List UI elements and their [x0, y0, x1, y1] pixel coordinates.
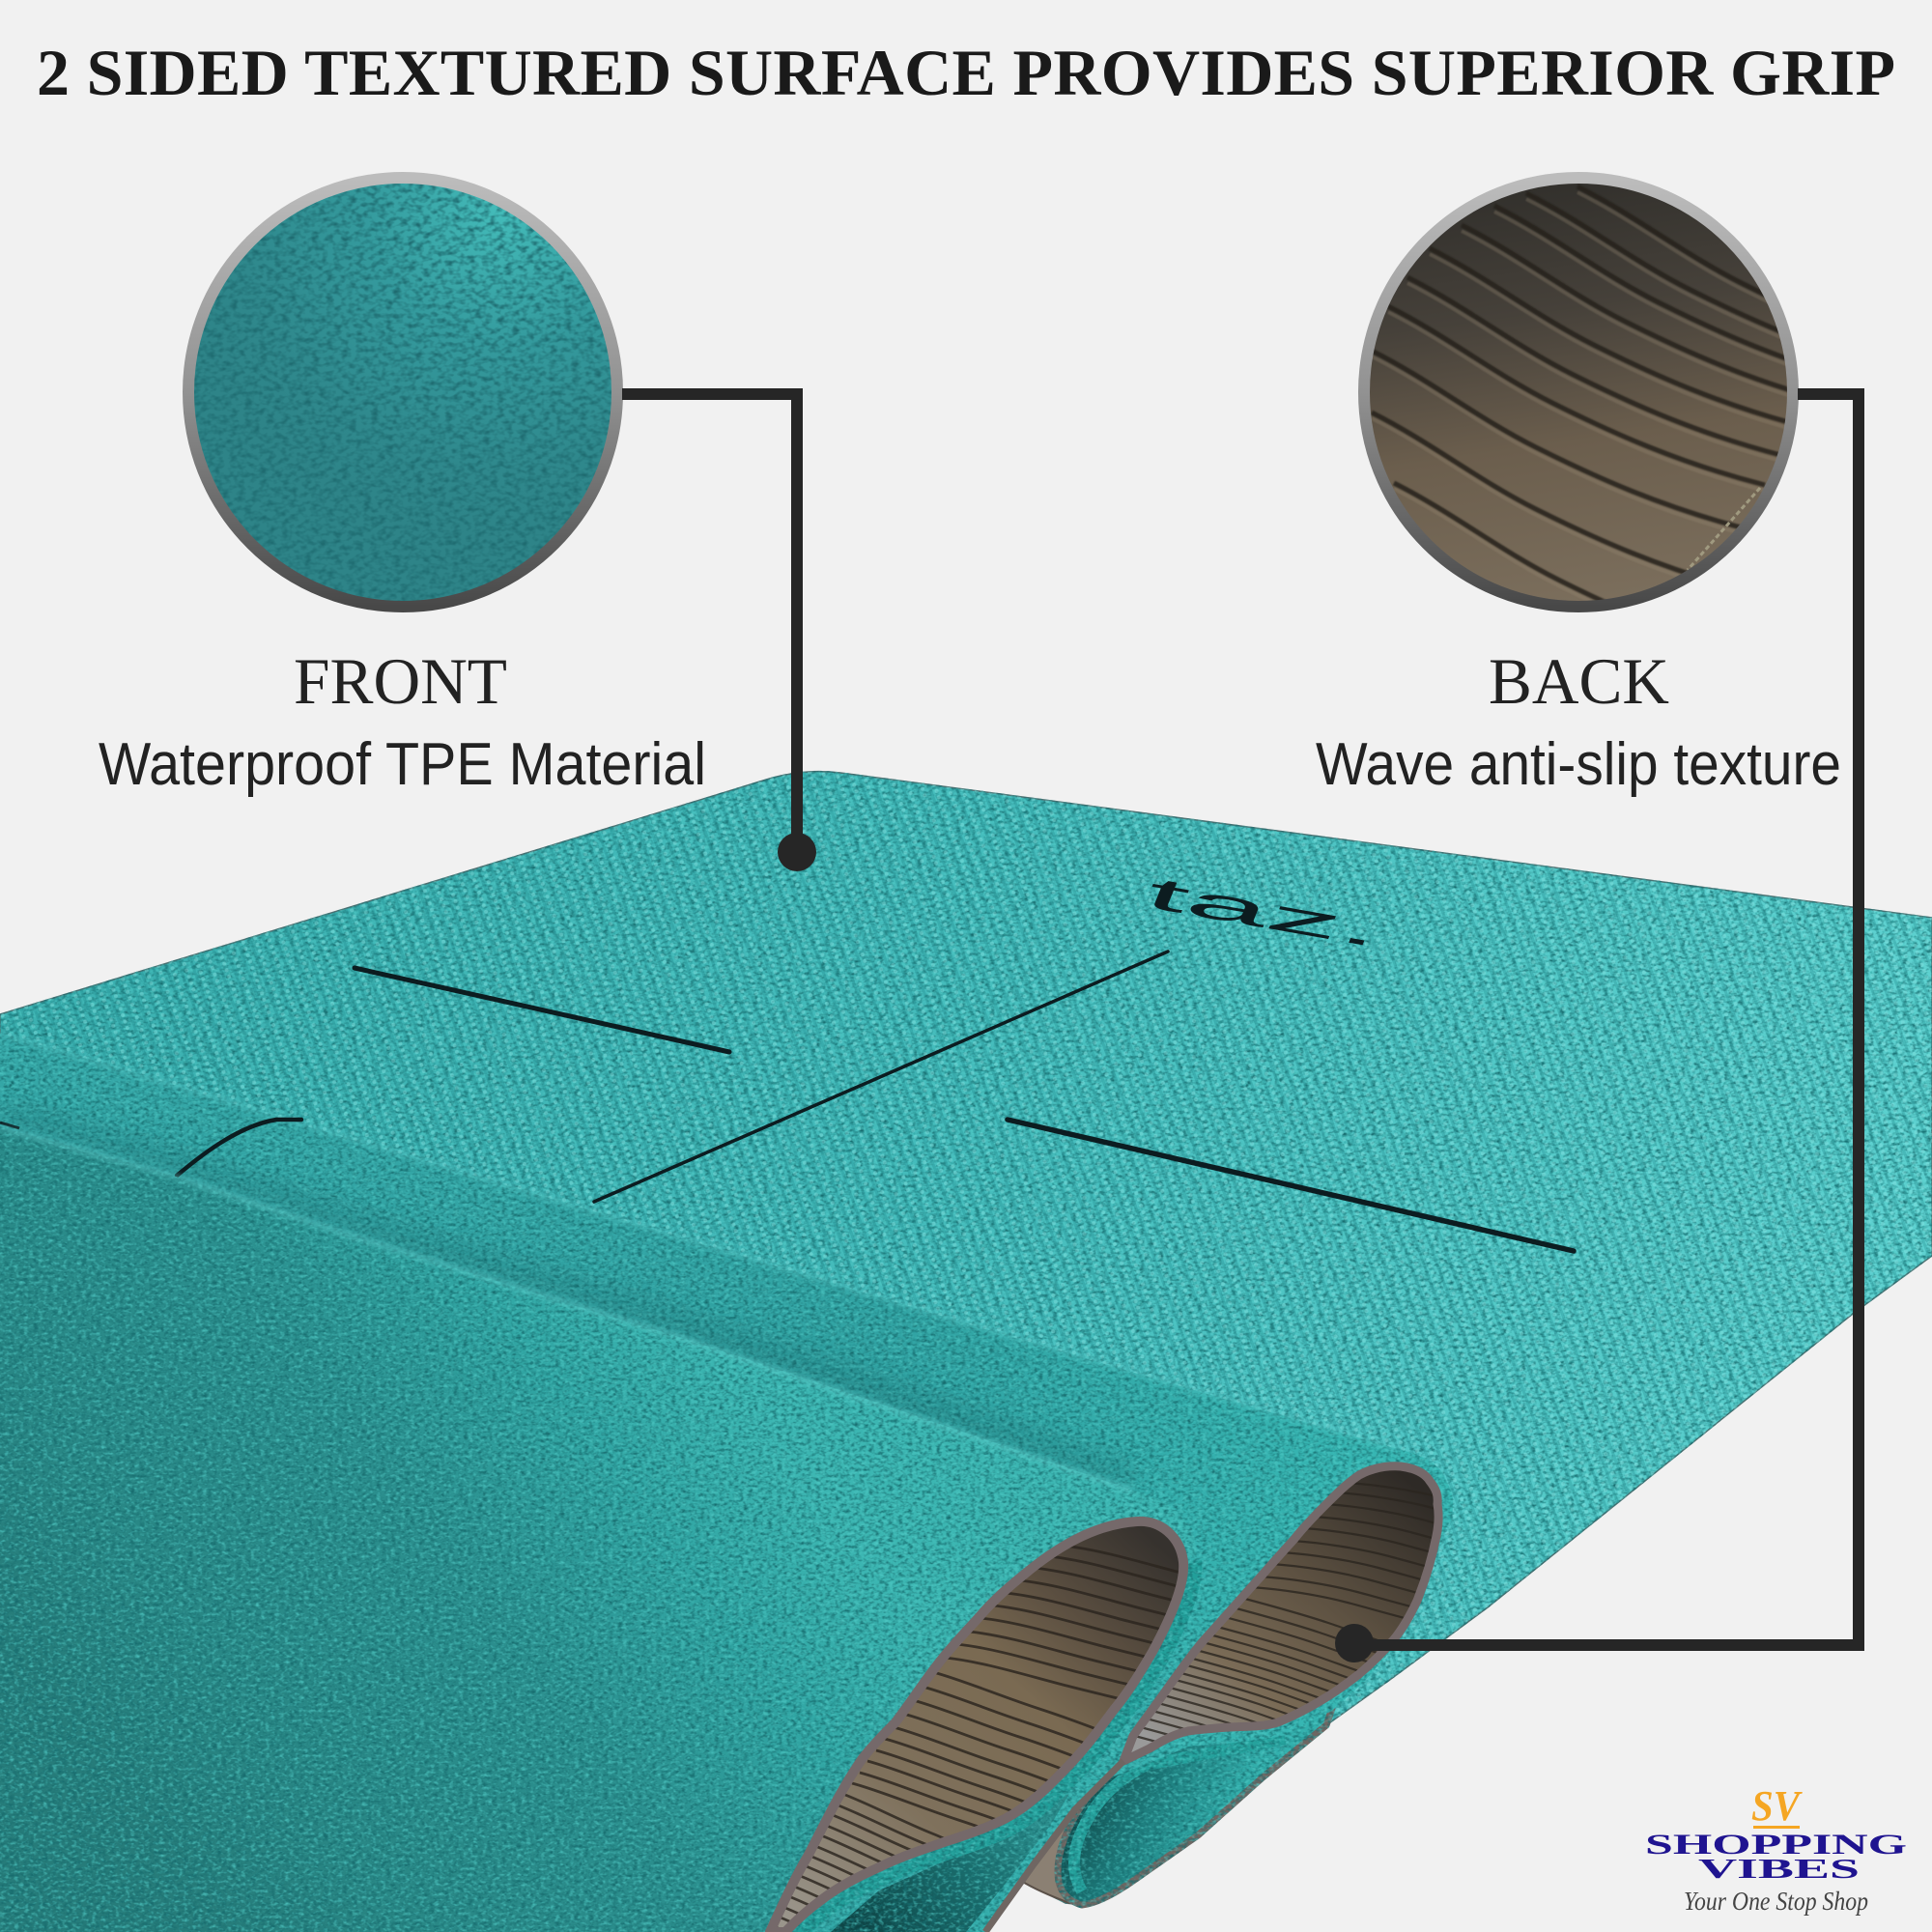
logo underline [1753, 1826, 1800, 1829]
logo name line 1: SHOPPING [1645, 1829, 1907, 1861]
yoga mat illustration [0, 772, 1932, 1932]
logo tagline: Your One Stop Shop [1684, 1887, 1868, 1916]
gray seam along the rear lip [985, 1761, 1123, 1932]
teal woven close-up [193, 183, 612, 602]
caption: Wave anti-slip texture: Wave anti-slip texture [1316, 731, 1841, 798]
shaded underside below front loop [831, 1794, 1069, 1932]
fold highlight: rear ridge [0, 1034, 1398, 1449]
title: 2 SIDED TEXTURED SURFACE PROVIDES SUPERIOR GRIP [37, 36, 1895, 109]
connector line [622, 394, 797, 850]
connector dot [1335, 1624, 1374, 1662]
caption: Waterproof TPE Material: Waterproof TPE Material [99, 731, 706, 798]
lobe shaded interior [1058, 1705, 1333, 1905]
detail circle: front texture [188, 178, 617, 607]
flat mat surface [0, 772, 1932, 1932]
line: curved mark over the rear fold [177, 1120, 301, 1176]
callout: front connector [622, 394, 816, 871]
lobe teal lip [1074, 1739, 1285, 1891]
callout: back connector [1335, 394, 1859, 1662]
fold highlight: front ridge [0, 1127, 1133, 1491]
front loop ribbed inner face [770, 1521, 1183, 1932]
rear loop wave ridges [1137, 1482, 1433, 1742]
line: small mark at left edge [0, 1122, 19, 1128]
connector line [1354, 394, 1859, 1645]
rear loop ribbed inner face [1123, 1466, 1438, 1761]
label: BACK: BACK [1489, 644, 1669, 718]
front fold surface [0, 1127, 1196, 1932]
line: upper alignment mark [355, 968, 729, 1052]
gradient ring [1364, 178, 1793, 607]
logo name line 2: VIBES [1698, 1855, 1860, 1885]
front loop wave ridges [777, 1546, 1179, 1927]
fold shadow above front ridge [0, 1116, 1130, 1478]
gradient ring [188, 178, 617, 607]
rear loop gray edge [1123, 1466, 1438, 1761]
front loop opening [765, 1517, 1202, 1932]
rear fold surface [0, 1034, 1453, 1932]
brown underside behind the lobe [1021, 1797, 1087, 1903]
connector dot [778, 833, 816, 871]
brand logo [1645, 1782, 1907, 1916]
front loop gray edge [770, 1521, 1183, 1932]
bottom lobe of the mat [1058, 1705, 1333, 1905]
line: diagonal alignment mark [594, 952, 1168, 1202]
rear loop opening [1119, 1462, 1443, 1766]
detail circle: back texture [1358, 172, 1799, 612]
logo monogram: SV [1751, 1782, 1803, 1830]
front loop teal edge [785, 1562, 1183, 1932]
wave close-up [1370, 184, 1787, 601]
label: FRONT: FRONT [294, 644, 507, 718]
line: lower alignment mark [1008, 1120, 1574, 1251]
brand mark on mat: taz. [1138, 867, 1392, 956]
